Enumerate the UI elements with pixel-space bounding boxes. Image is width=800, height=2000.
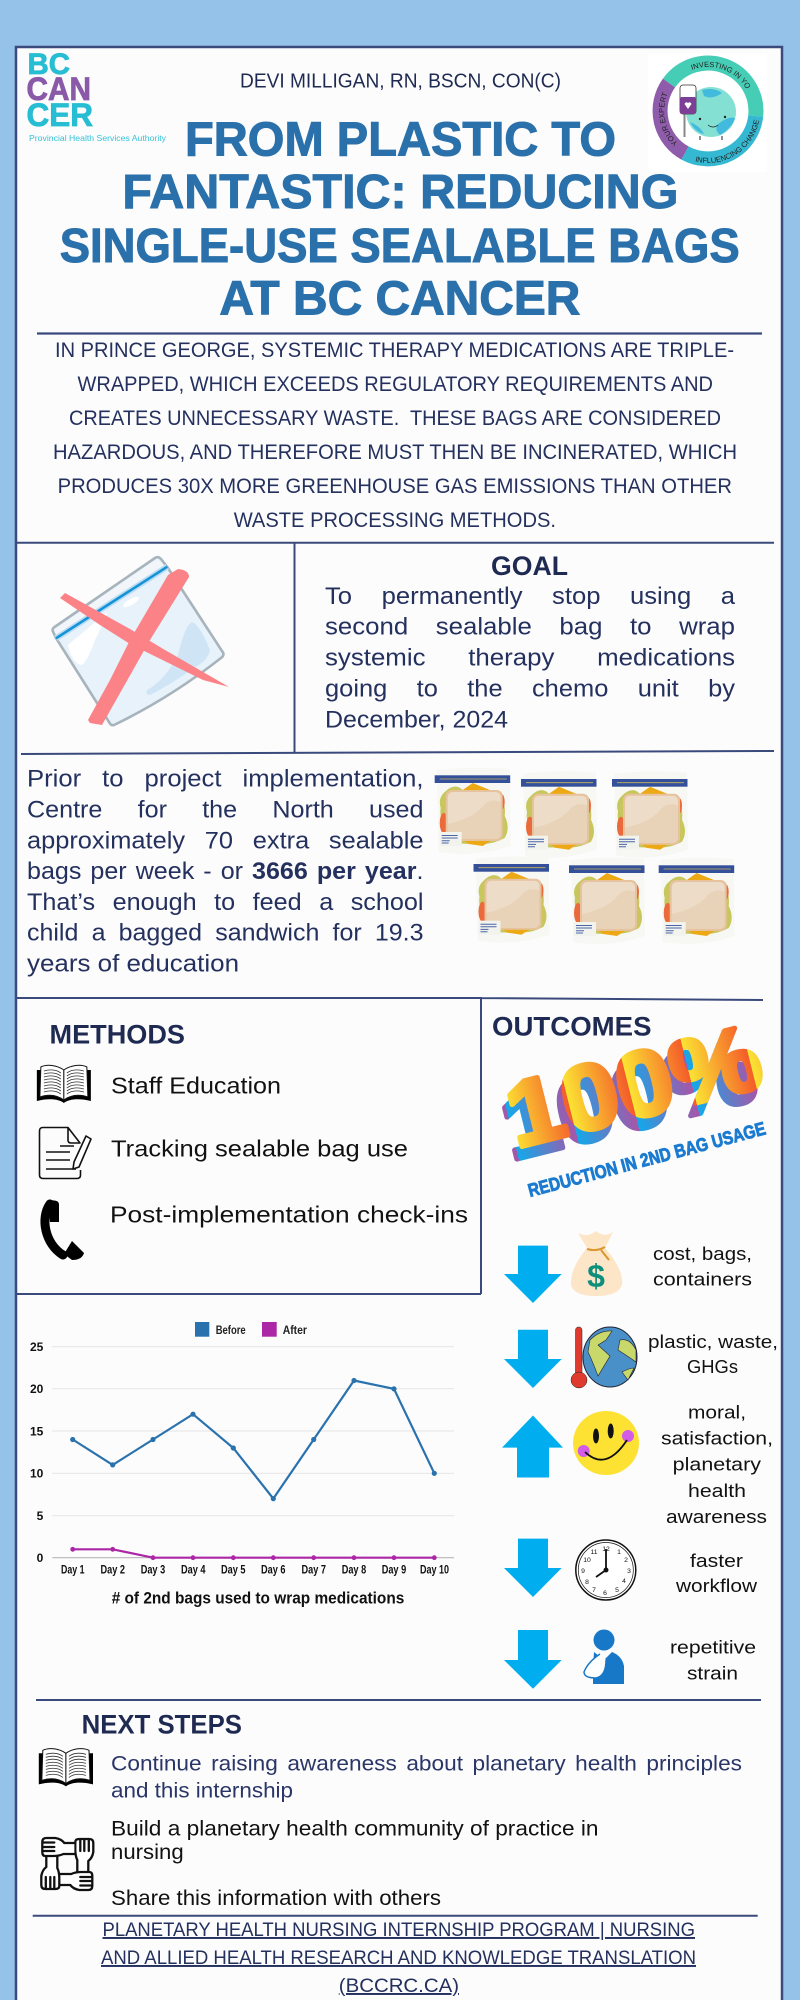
logo: BC Cancer: CER: [26, 97, 93, 133]
icon: money bag: [571, 1231, 622, 1296]
x axis labels: Day 1: [61, 1562, 85, 1576]
icon: person with arm sling: [584, 1630, 624, 1684]
label: faster workflow: [675, 1550, 758, 1596]
arrow: strain: [504, 1630, 562, 1689]
x axis labels: Day 4: [181, 1562, 206, 1576]
author byline: DEVI MILLIGAN, RN, BSCN, CON(C): [240, 70, 561, 92]
icon: phone: [45, 1200, 84, 1260]
icon: clock: 8: [585, 1579, 589, 1586]
label: plastic, waste, GHGs: plastic, waste,: [648, 1331, 778, 1352]
goal text: December, 2024: [325, 706, 508, 733]
icon: clock: 7: [592, 1587, 596, 1594]
icon: clock: 9: [581, 1568, 585, 1575]
icon: clock: 6: [603, 1590, 607, 1597]
label: morale and awareness: satisfaction,: [661, 1427, 773, 1448]
methods heading: METHODS: [50, 1019, 185, 1049]
intro paragraph: WRAPPED, WHICH EXCEEDS REGULATORY REQUIREMENTS AND: [78, 373, 713, 396]
next steps heading: NEXT STEPS: [82, 1709, 242, 1739]
footer link: AND ALLIED HEALTH RESEARCH AND KNOWLEDGE TRANSLATION: [101, 1947, 696, 1969]
logo: BC Cancer: Provincial Health Services Authority: [29, 133, 167, 143]
series: after: [70, 1547, 437, 1560]
icon: earth and thermometer: [571, 1327, 637, 1388]
x axis labels: Day 6: [261, 1562, 286, 1576]
y axis labels: [30, 1340, 44, 1565]
icons: bagged sandwiches: [435, 768, 735, 944]
label: plastic, waste, GHGs: [648, 1331, 778, 1377]
y axis labels: 5: [37, 1509, 44, 1523]
icon: smiley: [573, 1411, 639, 1475]
intro paragraph: [53, 339, 737, 532]
badge: planetary health internship: [652, 56, 764, 166]
y axis labels: 20: [30, 1382, 44, 1396]
chart: bags used before and after: [30, 1322, 454, 1607]
x axis labels: Day 8: [342, 1562, 366, 1576]
label: morale and awareness: moral,: [688, 1402, 746, 1423]
x axis labels: Day 10: [420, 1562, 449, 1576]
step: raise awareness: and this internship: [111, 1780, 293, 1803]
arrow: plastic down: [504, 1330, 562, 1388]
baseline text paragraph: child a bagged sandwich for 19.3: [27, 920, 423, 947]
title: AT BC CANCER: [219, 271, 580, 325]
series: before: [70, 1378, 437, 1501]
label: morale and awareness: awareness: [666, 1506, 767, 1527]
method: tracking: Tracking sealable bag use: [111, 1136, 408, 1162]
x axis labels: Day 2: [100, 1562, 125, 1576]
baseline text paragraph: [27, 766, 424, 978]
x axis labels: [61, 1562, 449, 1576]
icon: clock: 12: [602, 1546, 610, 1553]
goal heading: GOAL: [491, 551, 568, 581]
goal text: [325, 583, 736, 733]
title: SINGLE-USE SEALABLE BAGS: [60, 219, 740, 273]
icon: money bag: $: [587, 1258, 605, 1294]
outcomes heading: OUTCOMES: [492, 1012, 652, 1042]
goal text: To permanently stop using a: [325, 583, 736, 610]
arrow: cost down: [504, 1246, 562, 1303]
baseline text paragraph: That’s enough to feed a school: [27, 889, 423, 916]
icon: clock: 10: [583, 1557, 591, 1564]
label: faster workflow: workflow: [675, 1575, 758, 1596]
intro paragraph: HAZARDOUS, AND THEREFORE MUST THEN BE INCINERATED, WHICH: [53, 441, 737, 464]
step: share information: Share this information with others: [111, 1887, 441, 1910]
baseline text paragraph: years of education: [27, 951, 239, 978]
label: repetitive strain: repetitive: [670, 1636, 756, 1657]
title: FROM PLASTIC TO: [185, 112, 616, 166]
icon: book: [39, 1749, 93, 1786]
label: repetitive strain: [670, 1636, 756, 1684]
icon: clock: 3: [627, 1568, 631, 1575]
footer link: (BCCRC.CA): [339, 1975, 459, 1997]
arrow: morale up: [502, 1416, 563, 1478]
icon: clock: 1: [617, 1549, 621, 1556]
badge: planetary health internship: INFLUENCING CHANGE: [696, 120, 759, 163]
icon: clock: 11: [590, 1549, 598, 1556]
logo: BC Cancer: [26, 48, 167, 143]
step: community of practice: Build a planetary health community of practice in: [111, 1818, 598, 1841]
logo: BC Cancer: BC: [28, 48, 70, 81]
label: cost, bags, containers: cost, bags,: [653, 1243, 752, 1264]
icon: clock: 2: [624, 1557, 628, 1564]
goal text: second sealable bag to wrap: [325, 614, 735, 641]
intro paragraph: WASTE PROCESSING METHODS.: [234, 509, 556, 532]
label: faster workflow: faster: [690, 1550, 743, 1571]
step: community of practice: [111, 1818, 598, 1864]
logo: BC Cancer: CAN: [26, 71, 91, 107]
callout: 100% reduction: 100%: [491, 1019, 766, 1180]
label: plastic, waste, GHGs: GHGs: [687, 1356, 738, 1377]
icon: clock: 4: [622, 1578, 626, 1585]
label: repetitive strain: strain: [687, 1662, 738, 1684]
label: morale and awareness: planetary: [673, 1454, 762, 1475]
baseline text paragraph: approximately 70 extra sealable: [27, 827, 424, 854]
title: [60, 112, 740, 325]
y axis labels: 25: [30, 1340, 44, 1354]
method: staff education: Staff Education: [111, 1072, 281, 1098]
icon: linked hands: [41, 1838, 93, 1890]
y axis labels: 10: [30, 1467, 44, 1481]
chart legend: After: [283, 1325, 307, 1337]
label: cost, bags, containers: [653, 1243, 752, 1290]
arrow: workflow: [504, 1539, 562, 1597]
callout: 100% reduction: 100%: [496, 1006, 771, 1167]
x axis labels: Day 5: [221, 1562, 246, 1576]
icon: clock: 5: [615, 1587, 619, 1594]
chart legend: [195, 1322, 307, 1337]
step: raise awareness: Continue raising awareness about planetary health principles: [111, 1753, 742, 1776]
label: cost, bags, containers: containers: [653, 1269, 752, 1290]
intro paragraph: CREATES UNNECESSARY WASTE. THESE BAGS ARE CONSIDERED: [69, 407, 721, 430]
title: FANTASTIC: REDUCING: [122, 165, 678, 219]
label: morale and awareness: health: [688, 1480, 746, 1501]
baseline text paragraph: Prior to project implementation,: [27, 766, 424, 793]
y axis labels: 0: [37, 1551, 44, 1565]
x axis labels: Day 3: [141, 1562, 165, 1576]
step: community of practice: nursing: [111, 1841, 184, 1864]
label: morale and awareness: [661, 1402, 773, 1527]
footer link: [101, 1919, 696, 1997]
step: raise awareness: [111, 1753, 742, 1803]
icon: document and pencil: [40, 1128, 91, 1178]
chart legend: Before: [216, 1325, 246, 1337]
baseline text paragraph: Centre for the North used: [27, 796, 424, 823]
intro paragraph: PRODUCES 30X MORE GREENHOUSE GAS EMISSIONS THAN OTHER: [58, 475, 732, 498]
y axis labels: 15: [30, 1424, 44, 1438]
intro paragraph: IN PRINCE GEORGE, SYSTEMIC THERAPY MEDICATIONS ARE TRIPLE-: [55, 339, 734, 362]
baseline text paragraph: bags per week - or 3666 per year .: [27, 858, 423, 885]
icon: book: [37, 1065, 91, 1103]
chart caption: # of 2nd bags used to wrap medications: [112, 1588, 404, 1607]
goal text: going to the chemo unit by: [325, 676, 735, 703]
method: check-ins: Post-implementation check-ins: [110, 1202, 468, 1228]
x axis labels: Day 7: [302, 1562, 326, 1576]
icon: clock: [576, 1540, 636, 1600]
footer link: PLANETARY HEALTH NURSING INTERNSHIP PROGRAM | NURSING: [102, 1919, 695, 1941]
goal text: systemic therapy medications: [325, 645, 735, 672]
x axis labels: Day 9: [382, 1562, 406, 1576]
icon: crossed-out sealable bag: [53, 557, 229, 725]
